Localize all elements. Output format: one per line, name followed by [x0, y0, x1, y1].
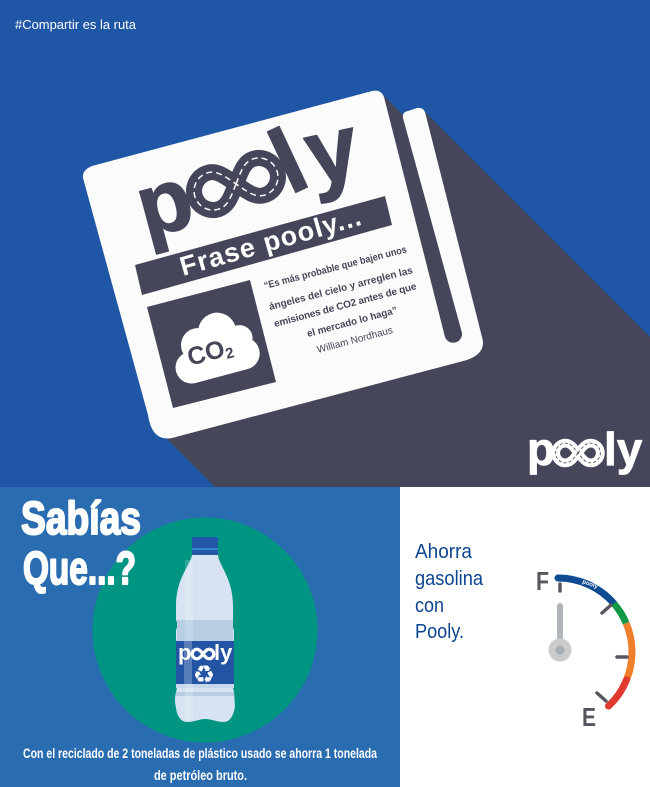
quote text: ángeles del cielo y arreglen las — [268, 265, 414, 313]
corner pooly logo: p — [527, 423, 555, 475]
label E: E — [582, 702, 596, 732]
gauge ticks — [560, 584, 627, 701]
icon: recycling symbol: ♻ — [193, 660, 215, 689]
newspaper pooly logo: y — [296, 95, 367, 206]
headline bar — [135, 196, 392, 295]
headline bar: Frase pooly... — [176, 201, 364, 282]
quote text: William Nordhaus — [316, 325, 394, 356]
icon: infinity road — [189, 153, 283, 215]
newspaper sheet — [83, 91, 483, 439]
fuel gauge — [536, 566, 632, 732]
caption: de petróleo bruto. — [154, 768, 247, 783]
heading: Sabías Que — [21, 492, 141, 594]
newspaper pooly logo: p — [125, 147, 203, 256]
slogan text: gasolina — [415, 567, 484, 590]
slogan text — [415, 540, 484, 643]
corner pooly logo: ly — [604, 423, 643, 475]
label pooly logo: p — [178, 640, 191, 665]
label pooly logo — [178, 640, 233, 665]
heading: Sabías Que: Sabías — [21, 492, 141, 544]
panel: newspaper poster — [0, 0, 650, 487]
panel: recycling fact — [0, 487, 400, 787]
bottle cap — [192, 537, 218, 555]
icon: CO2 cloud: 2 — [224, 344, 236, 363]
quote text: el mercado lo haga” — [306, 305, 399, 340]
caption: Con el reciclado de 2 toneladas de plástico usado se ahorra 1 tonelada — [23, 746, 377, 761]
caption — [23, 746, 377, 783]
quote text — [263, 244, 418, 356]
slogan text: Ahorra — [415, 540, 473, 563]
label F: F — [536, 566, 549, 596]
icon: CO2 cloud: CO — [184, 335, 228, 372]
newspaper pooly logo — [125, 95, 367, 256]
newspaper pooly logo: l — [255, 110, 322, 213]
slogan text: Pooly. — [415, 620, 464, 643]
CO2 box — [147, 280, 276, 408]
bottle label — [176, 641, 234, 684]
icon: plastic bottle — [175, 537, 235, 722]
long shadow — [165, 92, 650, 487]
corner pooly logo — [527, 423, 643, 475]
gauge arc — [558, 578, 632, 706]
green circle — [92, 518, 318, 742]
hashtag heading: #Compartir es la ruta — [15, 17, 137, 32]
panel: fuel saving — [400, 487, 650, 787]
icon: CO2 cloud — [164, 304, 263, 387]
quote text: “Es más probable que bajen unos — [263, 244, 408, 292]
heading: Sabías Que: Que...? — [23, 542, 136, 594]
gauge arc brand: pooly — [581, 579, 599, 591]
icon: small infinity road — [556, 443, 600, 463]
quote text: emisiones de CO2 antes de que — [273, 281, 418, 330]
slogan text: con — [415, 594, 444, 617]
label pooly logo: ly — [214, 640, 233, 665]
needle — [548, 606, 572, 662]
